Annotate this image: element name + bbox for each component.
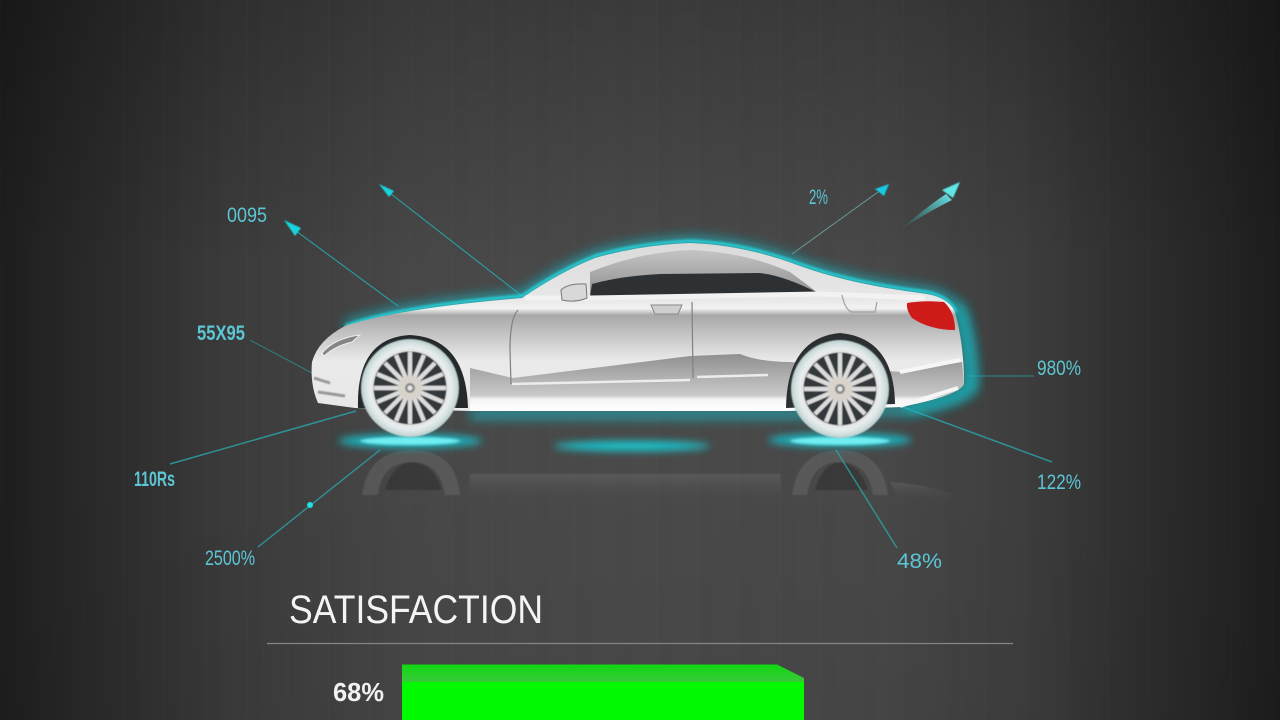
arrow: reflection lower right	[836, 450, 897, 548]
label: lower right: 122%	[1037, 471, 1081, 494]
label: lower left: 110Rs	[134, 468, 175, 491]
arrow: roof right	[792, 184, 889, 254]
bar top face	[402, 664, 804, 682]
rear wheel	[791, 340, 889, 438]
heading: satisfaction: SATISFACTION	[289, 588, 543, 632]
arrow: rear bumper	[966, 375, 1034, 377]
ground glows	[338, 433, 912, 451]
bar value: 68%	[333, 677, 384, 707]
tail light	[907, 301, 955, 330]
rear wheel arch	[786, 333, 895, 408]
car window	[590, 273, 818, 297]
rear sill highlight	[900, 360, 960, 406]
door handles	[651, 305, 682, 314]
car body	[312, 243, 964, 411]
car underbody glow	[468, 412, 786, 416]
side mirror	[561, 284, 587, 301]
front wheel arch	[358, 335, 468, 408]
label: upper left: 0095	[227, 204, 267, 227]
front bumper detail	[314, 378, 345, 396]
front wheel	[361, 339, 459, 437]
arrow: comet upper right	[900, 182, 960, 230]
bar front face	[402, 682, 804, 720]
label: bottom left: 2500%	[205, 547, 255, 570]
rear glow	[905, 305, 972, 410]
label: top right: 2%	[809, 186, 828, 209]
callout lines and arrows	[170, 182, 1052, 548]
arrow: front lower	[170, 411, 356, 464]
arrow: rear lower	[900, 406, 1052, 462]
car roof band	[590, 250, 818, 296]
car neon outline	[345, 241, 956, 326]
bar chart: satisfaction	[333, 664, 804, 720]
body lower shading	[470, 354, 964, 411]
body crease	[512, 375, 768, 384]
value labels	[134, 186, 1081, 573]
headlight	[322, 335, 360, 356]
label: bottom right: 48%	[897, 550, 942, 573]
car outer glow	[345, 241, 970, 414]
arrow: upper hood center	[379, 184, 522, 296]
arrow: upper hood left	[284, 220, 398, 306]
label: mid left: 55X95	[197, 322, 245, 345]
car	[312, 241, 972, 438]
label: mid right: 980%	[1037, 357, 1081, 380]
fender highlight	[480, 348, 505, 352]
arrow: reflection lower left	[258, 450, 380, 547]
arrow: front bumper	[250, 340, 312, 373]
trunk detail	[842, 295, 877, 312]
car belt line	[525, 294, 925, 298]
door shutlines	[510, 302, 693, 384]
car reflection	[362, 450, 968, 500]
